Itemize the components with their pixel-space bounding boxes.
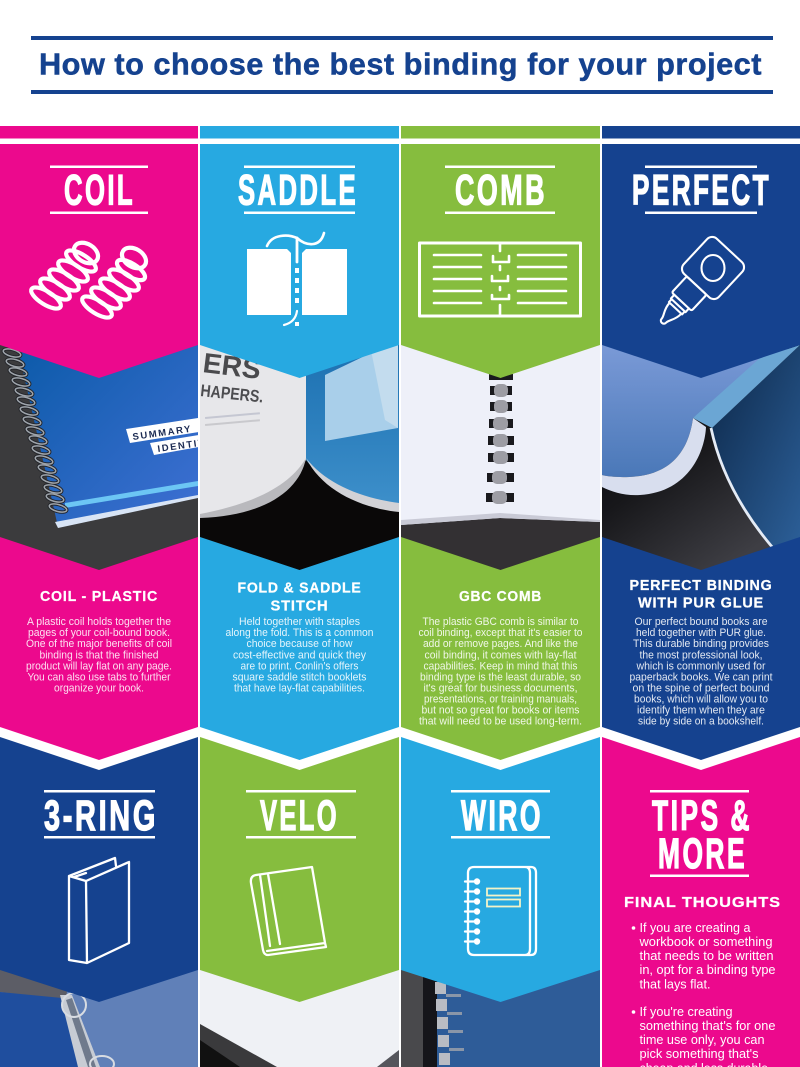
text block: side by side on a bookshelf. (638, 716, 764, 728)
text block: capabilities. Keep in mind that this (424, 660, 578, 672)
panel: comb (401, 144, 600, 378)
panel: coil (0, 144, 198, 378)
photo: perfect bound book (602, 340, 800, 572)
photo: coil bound notebook: IDENTITY (157, 436, 214, 455)
tip 1: workbook or something (639, 934, 772, 949)
icon: wire-o notebook (465, 867, 536, 955)
tip 1: If you are creating a (640, 920, 751, 935)
tip 2: something that's for one (640, 1018, 776, 1033)
subheading: final thoughts: FINAL THOUGHTS (624, 895, 781, 911)
heading: velo (246, 790, 356, 840)
text block: coil binding, it comes with lay-flat (424, 649, 577, 661)
icon: saddle stitch (247, 233, 347, 326)
subheading: WITH PUR GLUE (638, 596, 764, 612)
photo: velo bound book (200, 965, 399, 1067)
text block: paperback books. We can print (630, 671, 773, 683)
heading: coil: COIL (64, 166, 135, 214)
heading: coil (50, 166, 148, 214)
photo: saddle stitched booklet: ERS (201, 347, 263, 385)
photo: 3-ring binder (0, 965, 198, 1067)
heading: 3-ring: 3-RING (44, 792, 158, 840)
subheading: COIL - PLASTIC (40, 589, 158, 605)
text block: Held together with staples (239, 616, 360, 628)
subheading: FOLD & SADDLE (238, 581, 362, 597)
text block: You can also use tabs to further (28, 671, 171, 683)
text block: A plastic coil holds together the (27, 616, 171, 628)
text block (630, 616, 773, 728)
text block: choice because of how (246, 638, 353, 650)
photo: coil bound notebook: SUMMARY (132, 424, 193, 443)
heading: comb: COMB (455, 166, 547, 214)
text block: This durable binding provides (633, 638, 769, 650)
panel: comb description (401, 537, 600, 760)
heading: tips and more (650, 790, 752, 878)
tip 2: If you're creating (640, 1004, 732, 1019)
icon: velo book (251, 867, 326, 955)
tip 1: in, opt for a binding type (640, 962, 776, 977)
text block: which is commonly used for (636, 660, 766, 672)
title: How to choose the best binding for your project (39, 46, 762, 82)
text block: it's great for business documents, (424, 682, 578, 694)
top colour strip (0, 126, 800, 138)
panel: tips and more (602, 737, 800, 1067)
text block: the most professional look, (640, 649, 762, 661)
heading: 3-ring (44, 790, 158, 840)
photo: saddle stitched booklet (200, 340, 399, 572)
subheading: GBC COMB (459, 589, 542, 605)
text block: are to print. Conlin's offers (240, 660, 358, 672)
heading: saddle: SADDLE (238, 166, 358, 214)
heading: tips and more: MORE (658, 830, 747, 878)
text block: presentations, or training manuals, (424, 694, 577, 706)
text block (226, 616, 374, 694)
heading: saddle (238, 166, 358, 214)
panel: perfect description (602, 537, 800, 760)
tip 1 (632, 920, 776, 991)
photo: coil bound notebook (0, 345, 198, 570)
photo: wire-o bound book (401, 965, 600, 1067)
tip 2 (632, 1004, 776, 1067)
tip 1: that needs to be written (640, 948, 774, 963)
tip 2: time use only, you can (640, 1032, 764, 1047)
text block: coil binding, except that it's easier to (418, 627, 583, 639)
text block: organize your book. (54, 682, 144, 694)
text block: The plastic GBC comb is similar to (422, 616, 579, 628)
subheading (630, 578, 772, 612)
text block: add or remove pages. And like the (423, 638, 578, 650)
subheading: STITCH (270, 599, 328, 615)
icon: binder (69, 858, 129, 963)
panel: perfect (602, 144, 800, 378)
text block: identify them when they are (637, 704, 765, 716)
text block: product will lay flat on any page. (26, 660, 172, 672)
icon: comb bound pages (420, 243, 580, 316)
tip 1: that lays flat. (640, 976, 710, 991)
photo: saddle stitched booklet: HAPERS. (200, 381, 264, 407)
photo: comb bound book (401, 340, 600, 572)
text block: pages of your coil-bound book. (28, 627, 170, 639)
icon: glue bottle (644, 234, 747, 339)
heading: comb (445, 166, 555, 214)
text block: Our perfect bound books are (634, 616, 768, 628)
text block (26, 616, 172, 694)
text block: held together with PUR glue. (636, 627, 766, 639)
panel: saddle (200, 144, 399, 378)
tip 2: pick something that's (640, 1046, 759, 1061)
title (31, 36, 773, 94)
text block: binding is that the finished (40, 649, 159, 661)
panel: coil description (0, 537, 198, 760)
panel: wiro (401, 737, 600, 1002)
heading: velo: VELO (260, 792, 339, 840)
text block: on the spine of perfect bound (632, 682, 770, 694)
text block: One of the major benefits of coil (26, 638, 172, 650)
subheading (238, 581, 362, 615)
panel: 3-ring (0, 737, 198, 1002)
panel: saddle description (200, 537, 399, 760)
text block: that will need to be used long-term. (419, 716, 582, 728)
text block: along the fold. This is a common (226, 627, 374, 639)
text block: but not so great for books or items (422, 704, 580, 716)
text block: binding type is the least durable, so (420, 671, 581, 683)
text block: that have lay-flat capabilities. (234, 682, 365, 694)
text block: cost-effective and quick they (233, 649, 367, 661)
panel: velo (200, 737, 399, 1002)
text block: books, which will allow you to (634, 694, 768, 706)
subheading: PERFECT BINDING (630, 578, 772, 594)
heading: wiro: WIRO (461, 792, 543, 840)
text block: square saddle stitch booklets (232, 671, 366, 683)
icon: plastic coils (28, 238, 150, 322)
text block (418, 616, 583, 728)
heading: wiro (451, 790, 550, 840)
